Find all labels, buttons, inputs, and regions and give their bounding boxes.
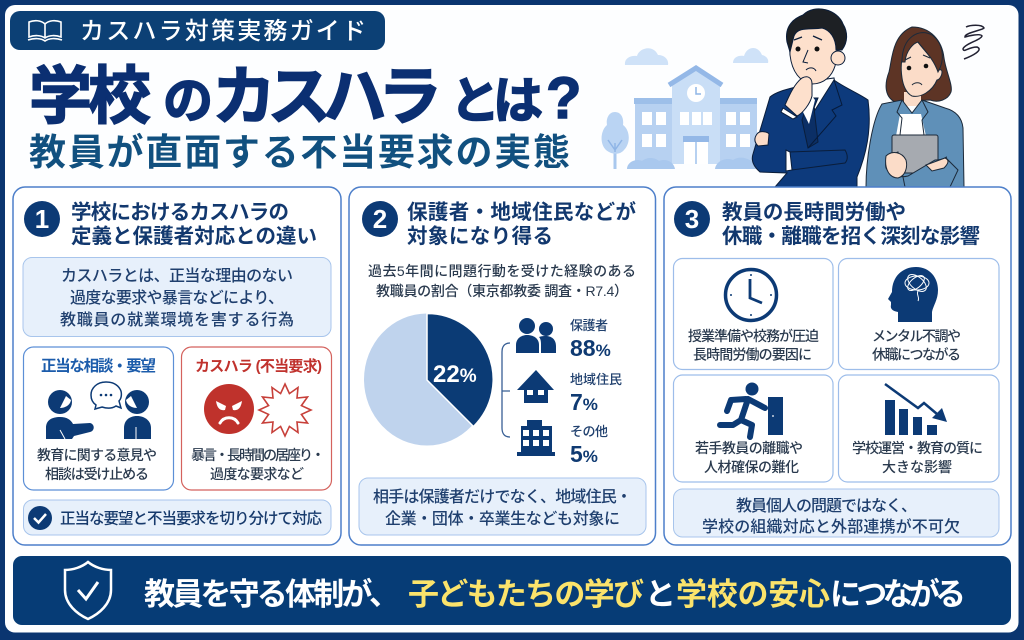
card: legitimate consultation: 教育に関する意見や <box>37 447 157 463</box>
card: mental health <box>838 258 999 370</box>
heading 1 <box>71 201 317 248</box>
card: customer harassment: カスハラ (不当要求) <box>195 357 322 375</box>
icon: school building <box>627 68 760 169</box>
note box 3 <box>674 489 999 537</box>
icon: head with tangled thoughts <box>888 267 938 322</box>
check note <box>24 500 331 535</box>
heading 2: 保護者・地域住民などが <box>407 200 636 224</box>
card: school quality: 大きな影響 <box>882 459 952 475</box>
note box 2: 相手は保護者だけでなく、地域住民・ <box>373 488 632 506</box>
heading 3 <box>722 201 980 248</box>
pie chart: 22% <box>364 313 493 446</box>
icon: clock <box>726 270 776 320</box>
badge: guide label <box>10 11 385 50</box>
number badge 3 <box>674 201 710 237</box>
banner message: 教員を守る体制が、 <box>144 577 400 612</box>
heading 3: 休職・離職を招く深刻な影響 <box>722 225 980 248</box>
icon: person running to door <box>720 382 783 437</box>
number badge 1 <box>24 201 60 237</box>
card: customer harassment <box>182 347 332 490</box>
card: mental health: メンタル不調や <box>872 328 961 344</box>
stat: guardians 88%: 保護者 <box>570 318 608 333</box>
bracket <box>502 343 510 437</box>
card: customer harassment: 暴言・長時間の居座り・ <box>191 447 325 463</box>
title: の <box>163 73 213 129</box>
number badge 1: 1 <box>35 204 49 234</box>
illustration: woman teacher <box>866 25 984 187</box>
illustration: man teacher <box>752 9 869 187</box>
subtitle: 教員が直面する不当要求の実態 <box>29 132 570 173</box>
note box 3: 学校の組織対応と外部連携が不可欠 <box>702 517 960 536</box>
banner message: と <box>645 577 676 612</box>
definition box: 教職員の就業環境を害する行為 <box>60 311 294 329</box>
heading 2 <box>407 200 636 248</box>
icon: two people talking <box>46 390 151 439</box>
heading 1: 定義と保護者対応との違い <box>71 225 317 248</box>
card: legitimate consultation: 相談は受け止める <box>45 466 149 482</box>
card: long hours: 授業準備や校務が圧迫 <box>688 328 819 344</box>
stat: local residents 7% <box>517 370 622 415</box>
title: とは <box>450 73 543 129</box>
stat: others 5% <box>517 420 608 467</box>
survey caption <box>368 263 636 299</box>
panel 1: definition <box>13 187 341 545</box>
panel 2: targets <box>349 187 656 545</box>
survey caption: 過去5年間に問題行動を受けた経験のある <box>368 263 636 279</box>
check note: 正当な要望と不当要求を切り分けて対応 <box>60 510 322 528</box>
pie chart: 22%: 22% <box>433 361 477 388</box>
card: legitimate consultation <box>24 347 174 490</box>
stat: local residents 7%: 地域住民 <box>570 372 622 387</box>
card: resignation: 若手教員の離職や <box>695 440 803 456</box>
note box 2 <box>359 478 646 535</box>
heading 2: 対象になり得る <box>407 224 553 248</box>
card: legitimate consultation: 正当な相談・要望 <box>41 357 156 375</box>
heading 1: 学校におけるカスハラの <box>71 201 289 224</box>
definition box: 過度な要求や暴言などにより、 <box>70 289 284 307</box>
card: long hours <box>674 258 833 370</box>
icon: clouds <box>625 48 768 65</box>
icon: worry squiggle <box>963 25 984 59</box>
definition box <box>23 258 331 336</box>
icon: open book <box>28 21 62 41</box>
heading 3: 教員の長時間労働や <box>722 201 906 224</box>
title: ? <box>546 66 581 131</box>
banner message: 子どもたちの学び <box>408 577 644 612</box>
note box 3: 教員個人の問題ではなく、 <box>736 497 917 515</box>
number badge 3: 3 <box>685 204 699 234</box>
footer banner <box>13 556 1011 625</box>
number badge 2 <box>362 201 398 237</box>
stat: guardians 88%: 88% <box>570 335 611 361</box>
card: school quality <box>838 375 999 482</box>
banner message: につながる <box>830 577 966 612</box>
icon: speech bubble <box>91 382 121 409</box>
stat: local residents 7%: 7% <box>570 389 598 415</box>
title: 学校 <box>29 62 151 132</box>
panel 3: impacts <box>664 187 1011 545</box>
icon: shield with check <box>65 562 111 619</box>
note box 2: 企業・団体・卒業生なども対象に <box>385 509 620 528</box>
illustration: school scene <box>602 48 768 169</box>
icon: angry face <box>204 384 254 434</box>
stat: others 5%: 5% <box>570 441 598 467</box>
number badge 2: 2 <box>373 204 387 234</box>
banner message <box>144 577 966 612</box>
survey caption: 教職員の割合（東京都教委 調査・R7.4） <box>376 283 628 299</box>
card: resignation: 人材確保の難化 <box>704 459 799 475</box>
definition box: カスハラとは、正当な理由のない <box>61 267 293 285</box>
icon: falling bar chart <box>885 384 947 435</box>
card: long hours: 長時間労働の要因に <box>693 346 812 362</box>
card: mental health: 休職につながる <box>872 346 961 362</box>
stat: others 5%: その他 <box>570 424 608 439</box>
badge: guide label: カスハラ対策実務ガイド <box>80 18 366 45</box>
banner message: 学校の安心 <box>676 577 830 612</box>
title: カスハラ <box>212 61 442 133</box>
card: customer harassment: 過度な要求など <box>210 466 304 482</box>
title <box>29 61 581 133</box>
card: resignation <box>674 375 833 482</box>
icon: burst <box>259 384 311 436</box>
icon: tree <box>602 112 629 169</box>
stat: guardians 88% <box>516 318 611 361</box>
card: school quality: 学校運営・教育の質に <box>852 440 983 456</box>
